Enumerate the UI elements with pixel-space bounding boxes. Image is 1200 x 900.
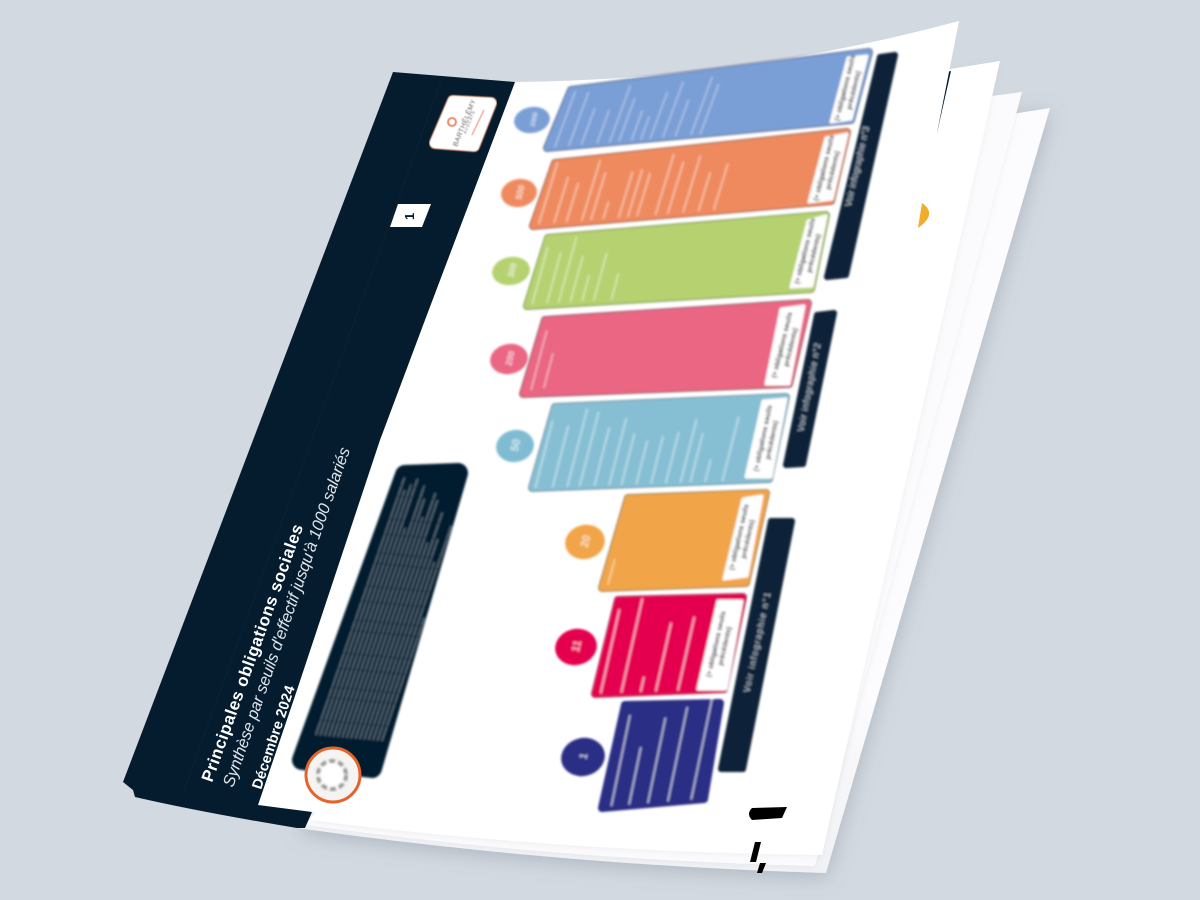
- threshold cards: [523, 52, 869, 808]
- tab: infographie 3: [827, 55, 895, 277]
- page number: 1: [402, 213, 417, 220]
- card: amber: [602, 493, 766, 588]
- tab: infographie 1: [721, 521, 792, 769]
- logo: BARTHÉLÉMY: [451, 98, 478, 148]
- badge 500: [499, 176, 539, 210]
- badge 300: [490, 254, 532, 288]
- panel: introduction note: [302, 473, 470, 768]
- badge 200: [487, 340, 531, 378]
- tab: infographie 1: Voir infographie n°1: [742, 591, 773, 693]
- page number: [390, 204, 431, 227]
- card: crimson: précédents): [717, 626, 733, 666]
- logo: [435, 98, 491, 148]
- black corner marks: [749, 807, 787, 873]
- logo: AVOCATS: [462, 110, 476, 134]
- badge 11: [551, 624, 601, 670]
- tab: infographie 2: [786, 313, 834, 465]
- badge 20: [561, 521, 609, 563]
- back cover strip: [932, 71, 951, 133]
- icon: gear badge: [306, 748, 360, 802]
- badge 50: [493, 426, 537, 466]
- badge 500: 500: [513, 184, 527, 201]
- card: orange: précédents): [825, 150, 842, 190]
- date: Décembre 2024: [250, 684, 299, 791]
- front page: [258, 21, 959, 842]
- badge 1: [557, 733, 609, 781]
- card: crimson: [595, 597, 743, 694]
- card: orange: [533, 132, 847, 226]
- dark side band: [123, 72, 515, 828]
- badge 11: 11: [570, 639, 584, 653]
- badge 1000: 1000: [529, 111, 540, 128]
- card: blue: précédents): [846, 70, 863, 110]
- badge 20: 20: [579, 534, 593, 549]
- card: blue: [547, 52, 869, 148]
- badge 300: 300: [505, 262, 519, 279]
- tab: infographie 2: Voir infographie n°2: [796, 342, 823, 433]
- card: green: précédents): [806, 233, 823, 273]
- card: blue: (+ obligations seuils: [834, 54, 857, 122]
- card: orange: (+ obligations seuils: [813, 134, 836, 202]
- badge 200: 200: [503, 350, 517, 367]
- card: pink: (+ obligations seuils: [771, 311, 794, 379]
- card: green: [527, 215, 826, 306]
- card: light blue: (+ obligations seuils: [753, 404, 774, 472]
- orange half circle: [918, 203, 929, 228]
- title: Principales obligations sociales: [198, 522, 307, 784]
- tab: infographie 3: Voir infographie n°3: [843, 125, 871, 207]
- threshold badges: [487, 104, 609, 781]
- card: pink: précédents): [783, 327, 800, 367]
- rear pages: [297, 61, 1050, 873]
- card: amber: (+ obligations seuils: [729, 503, 751, 571]
- subtitle: Synthèse par seuils d'effectif jusqu'à 1000 salariés: [220, 445, 354, 789]
- card: green: (+ obligations seuils: [794, 217, 817, 285]
- badge 50: 50: [509, 438, 523, 453]
- card: crimson: (+ obligations seuils: [706, 610, 728, 678]
- badge 1: 1: [578, 752, 591, 761]
- badge 1000: [512, 104, 552, 136]
- side tabs: [721, 55, 895, 769]
- note text lines: [316, 478, 470, 740]
- card: light blue: [532, 397, 786, 488]
- card: light blue: précédents): [765, 420, 780, 460]
- card: navy: [602, 698, 720, 808]
- card: amber: précédents): [740, 519, 756, 559]
- card: pink: [523, 303, 808, 394]
